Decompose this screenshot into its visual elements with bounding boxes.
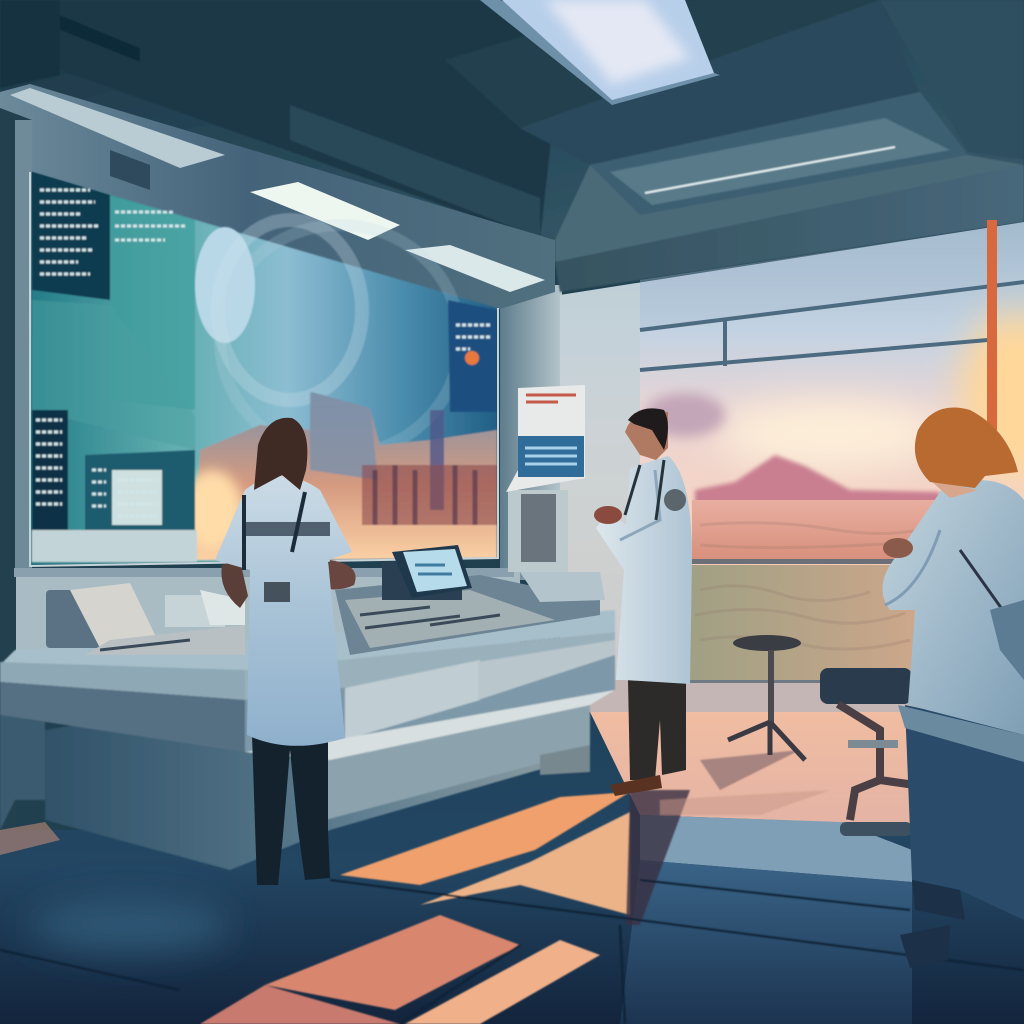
mountain [695, 455, 940, 512]
person: doctor standing [594, 408, 692, 796]
desk monitor [382, 545, 472, 600]
desk top [0, 610, 615, 670]
desk [0, 610, 615, 870]
screen city [195, 392, 497, 560]
exam chair [820, 668, 915, 836]
ceiling [0, 0, 1024, 292]
person: woman at right [882, 408, 1024, 968]
legs [252, 735, 330, 885]
person: woman at desk [215, 418, 356, 885]
stool [728, 635, 805, 760]
wall chart board [506, 385, 585, 572]
screen text lines [36, 190, 490, 516]
corner floor glow [0, 822, 60, 855]
coat [215, 476, 352, 746]
floor [0, 712, 1024, 1024]
main wall screen [30, 172, 497, 565]
printers and papers [46, 572, 605, 655]
floor light patches [0, 750, 1024, 1024]
badge [664, 489, 686, 511]
soffit above the screen with light strips [0, 84, 555, 310]
head [930, 480, 978, 498]
coat [596, 456, 692, 684]
window [560, 220, 1024, 712]
hair [254, 418, 307, 490]
screen frame [14, 172, 514, 577]
legs [628, 680, 686, 780]
arms [221, 560, 248, 608]
head [625, 411, 668, 460]
desk base [45, 640, 590, 870]
lower body and cabinet [905, 705, 1024, 920]
coat [882, 480, 1024, 735]
skylight panel [480, 0, 720, 105]
hands [594, 506, 622, 524]
hands [883, 538, 913, 558]
